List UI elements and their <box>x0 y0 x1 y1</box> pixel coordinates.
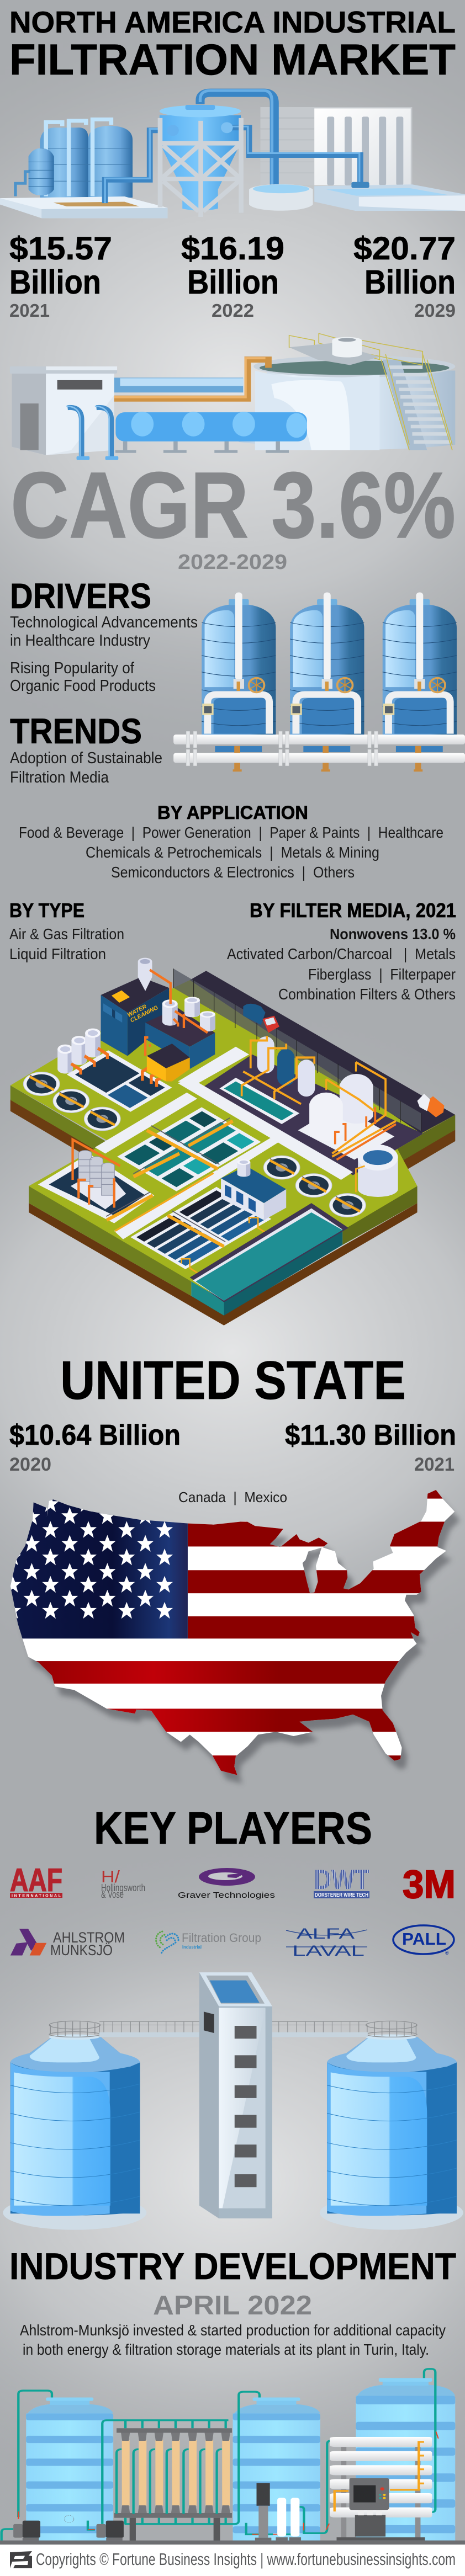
value 2029: $20.77 <box>353 231 456 267</box>
value 2021: 2021 <box>9 300 50 321</box>
right tank <box>356 2378 455 2541</box>
application list: Semiconductors & Electronics | Others <box>111 864 355 881</box>
central filtration beds <box>117 1107 261 1191</box>
logo: Alfa Laval <box>286 1925 367 1959</box>
value 2021: 2021 <box>414 1454 455 1475</box>
value 2020: 2020 <box>9 1454 51 1475</box>
small office building <box>221 1166 286 1203</box>
main blue factory buildings <box>101 977 169 1013</box>
lower filter beds <box>130 1187 271 1269</box>
application list <box>19 824 443 881</box>
logo: Graver Technologies: Graver Technologies <box>178 1891 275 1900</box>
logo: Filtration Group: Filtration Group <box>182 1931 261 1945</box>
teal piping <box>2 2369 435 2541</box>
title <box>9 5 456 84</box>
logo: Ahlstrom Munksjo: AHLSTROM <box>53 1929 125 1946</box>
by application: BY APPLICATION <box>157 802 308 823</box>
logo: Hollingsworth & Vose: & Vose <box>101 1889 124 1900</box>
logo: Filtration Group <box>156 1931 261 1954</box>
value 2029: Billion <box>364 263 456 301</box>
building sign: WATER <box>126 1003 148 1019</box>
trend items: Adoption of Sustainable <box>10 749 162 767</box>
media list <box>227 945 456 1003</box>
logo: Pall: PALL <box>402 1929 446 1949</box>
development description <box>20 2322 446 2358</box>
logo: Filtration Group: Industrial <box>182 1945 202 1950</box>
value 2029 <box>353 231 456 321</box>
large open water tank <box>358 1160 398 1197</box>
US values <box>9 1419 456 1475</box>
value 2021: $11.30 Billion <box>285 1419 456 1451</box>
by type: BY TYPE <box>9 899 84 922</box>
key players heading: KEY PLAYERS <box>94 1802 372 1854</box>
building sign: CLEANING <box>129 1004 159 1024</box>
driver items: Rising Popularity of <box>10 659 135 677</box>
logo: AAF: INTERNATIONAL <box>12 1894 61 1898</box>
by type <box>9 899 124 962</box>
pond <box>190 1203 348 1302</box>
neighbouring countries: Canada | Mexico <box>178 1489 287 1505</box>
by filter media <box>227 899 456 1003</box>
logo: Graver Technologies <box>178 1868 275 1900</box>
middle tank <box>233 2397 320 2541</box>
united states heading: UNITED STATE <box>60 1350 406 1411</box>
illustration: three pressure tanks <box>173 592 465 771</box>
drivers: DRIVERS <box>10 576 151 616</box>
illustration: twin silos and tower <box>3 1972 463 2230</box>
reverse osmosis unit <box>330 2437 432 2541</box>
logo: Hollingsworth & Vose: H/ <box>101 1867 120 1886</box>
logo: AAF: AAF <box>10 1862 62 1898</box>
value 2029: 2029 <box>414 300 456 321</box>
media share: Nonwovens 13.0 % <box>330 925 456 943</box>
driver items <box>10 614 198 695</box>
trends: TRENDS <box>10 711 142 751</box>
value 2022: Billion <box>187 263 279 301</box>
logo: 3M: 3M <box>403 1863 456 1907</box>
value 2022: $16.19 <box>181 231 284 267</box>
value 2022 <box>181 231 284 321</box>
illustration: filtration plant with blue tanks <box>0 91 465 218</box>
title: NORTH AMERICA INDUSTRIAL <box>9 5 456 39</box>
value 2021: $15.57 <box>9 231 112 267</box>
logo: Pall: ® <box>445 1950 449 1956</box>
delivery truck <box>427 1097 444 1117</box>
drivers <box>10 576 198 695</box>
value 2021 <box>9 231 112 321</box>
market values <box>9 231 456 321</box>
footer logo <box>10 2551 32 2568</box>
type list: Liquid Filtration <box>9 945 106 962</box>
lower left silo tray <box>38 1153 154 1223</box>
trend items <box>10 749 162 786</box>
company logos <box>10 1862 456 1959</box>
title: FILTRATION MARKET <box>9 35 456 84</box>
value 2020 <box>9 1419 181 1475</box>
driver items: Organic Food Products <box>10 677 156 695</box>
by application <box>19 802 443 881</box>
illustration: US flag map <box>0 1488 465 1784</box>
CAGR <box>10 453 456 574</box>
logo: Dorstener Wire Tech: DORSTENER WIRE TECH <box>315 1892 368 1898</box>
illustration: clarifier tank and pump house <box>10 333 455 460</box>
trend items: Filtration Media <box>10 769 109 786</box>
logo: Hollingsworth & Vose: Hollingsworth <box>101 1882 145 1893</box>
type list: Air & Gas Filtration <box>9 925 124 943</box>
CAGR period: 2022-2029 <box>178 551 287 574</box>
trends <box>10 711 162 786</box>
driver items: in Healthcare Industry <box>10 632 150 650</box>
logo: Alfa Laval: LAVAL <box>292 1942 364 1959</box>
logo: Ahlstrom Munksjo <box>10 1929 125 1958</box>
value 2021: Billion <box>9 263 101 301</box>
driver items: Technological Advancements <box>10 614 198 631</box>
logo: Hollingsworth & Vose <box>101 1867 145 1900</box>
illustration: isometric water treatment plant <box>10 958 455 1326</box>
value 2022: 2022 <box>212 300 254 321</box>
tanker truck <box>243 1004 266 1025</box>
pumps <box>13 2431 438 2541</box>
development date: APRIL 2022 <box>153 2291 312 2320</box>
application list: Chemicals & Petrochemicals | Metals & Mining <box>86 844 379 861</box>
white cartridge housings <box>276 2498 301 2541</box>
membrane filter rack <box>114 2420 232 2541</box>
type list <box>9 925 124 962</box>
illustration: water treatment tanks and membrane filters <box>0 2369 465 2545</box>
logo: Alfa Laval: ALFA <box>297 1925 355 1942</box>
logo: Pall <box>393 1925 454 1956</box>
left tank <box>26 2397 113 2541</box>
value 2021 <box>285 1419 456 1475</box>
logo: Dorstener Wire Tech: DWT <box>314 1864 369 1895</box>
logo: Ahlstrom Munksjo: MUNKSJÖ <box>50 1942 113 1958</box>
footer <box>0 2545 465 2576</box>
pressure vessels yard <box>219 1078 299 1124</box>
value 2020: $10.64 Billion <box>9 1419 181 1451</box>
upper left settling pools <box>67 1050 172 1112</box>
